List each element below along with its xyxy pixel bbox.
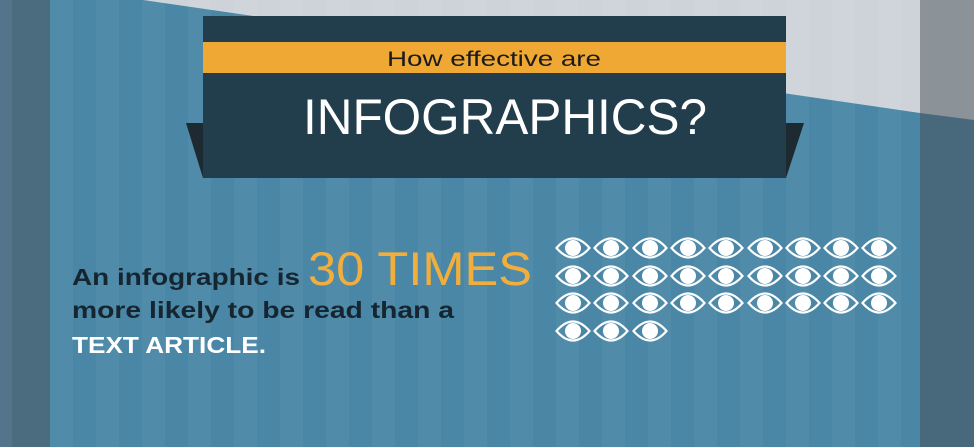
subtitle band [203, 42, 786, 73]
icon grid: 30 eyes [556, 238, 896, 340]
statistic text: TEXT ARTICLE. [72, 332, 266, 358]
statistic text: 30 TIMES [308, 242, 532, 295]
statistic text [72, 242, 532, 358]
title banner [186, 16, 804, 178]
subtitle band: How effective are [387, 48, 601, 71]
statistic text: more likely to be read than a [72, 297, 454, 323]
statistic text: An infographic is [72, 264, 300, 290]
main title: INFOGRAPHICS? [303, 89, 707, 145]
